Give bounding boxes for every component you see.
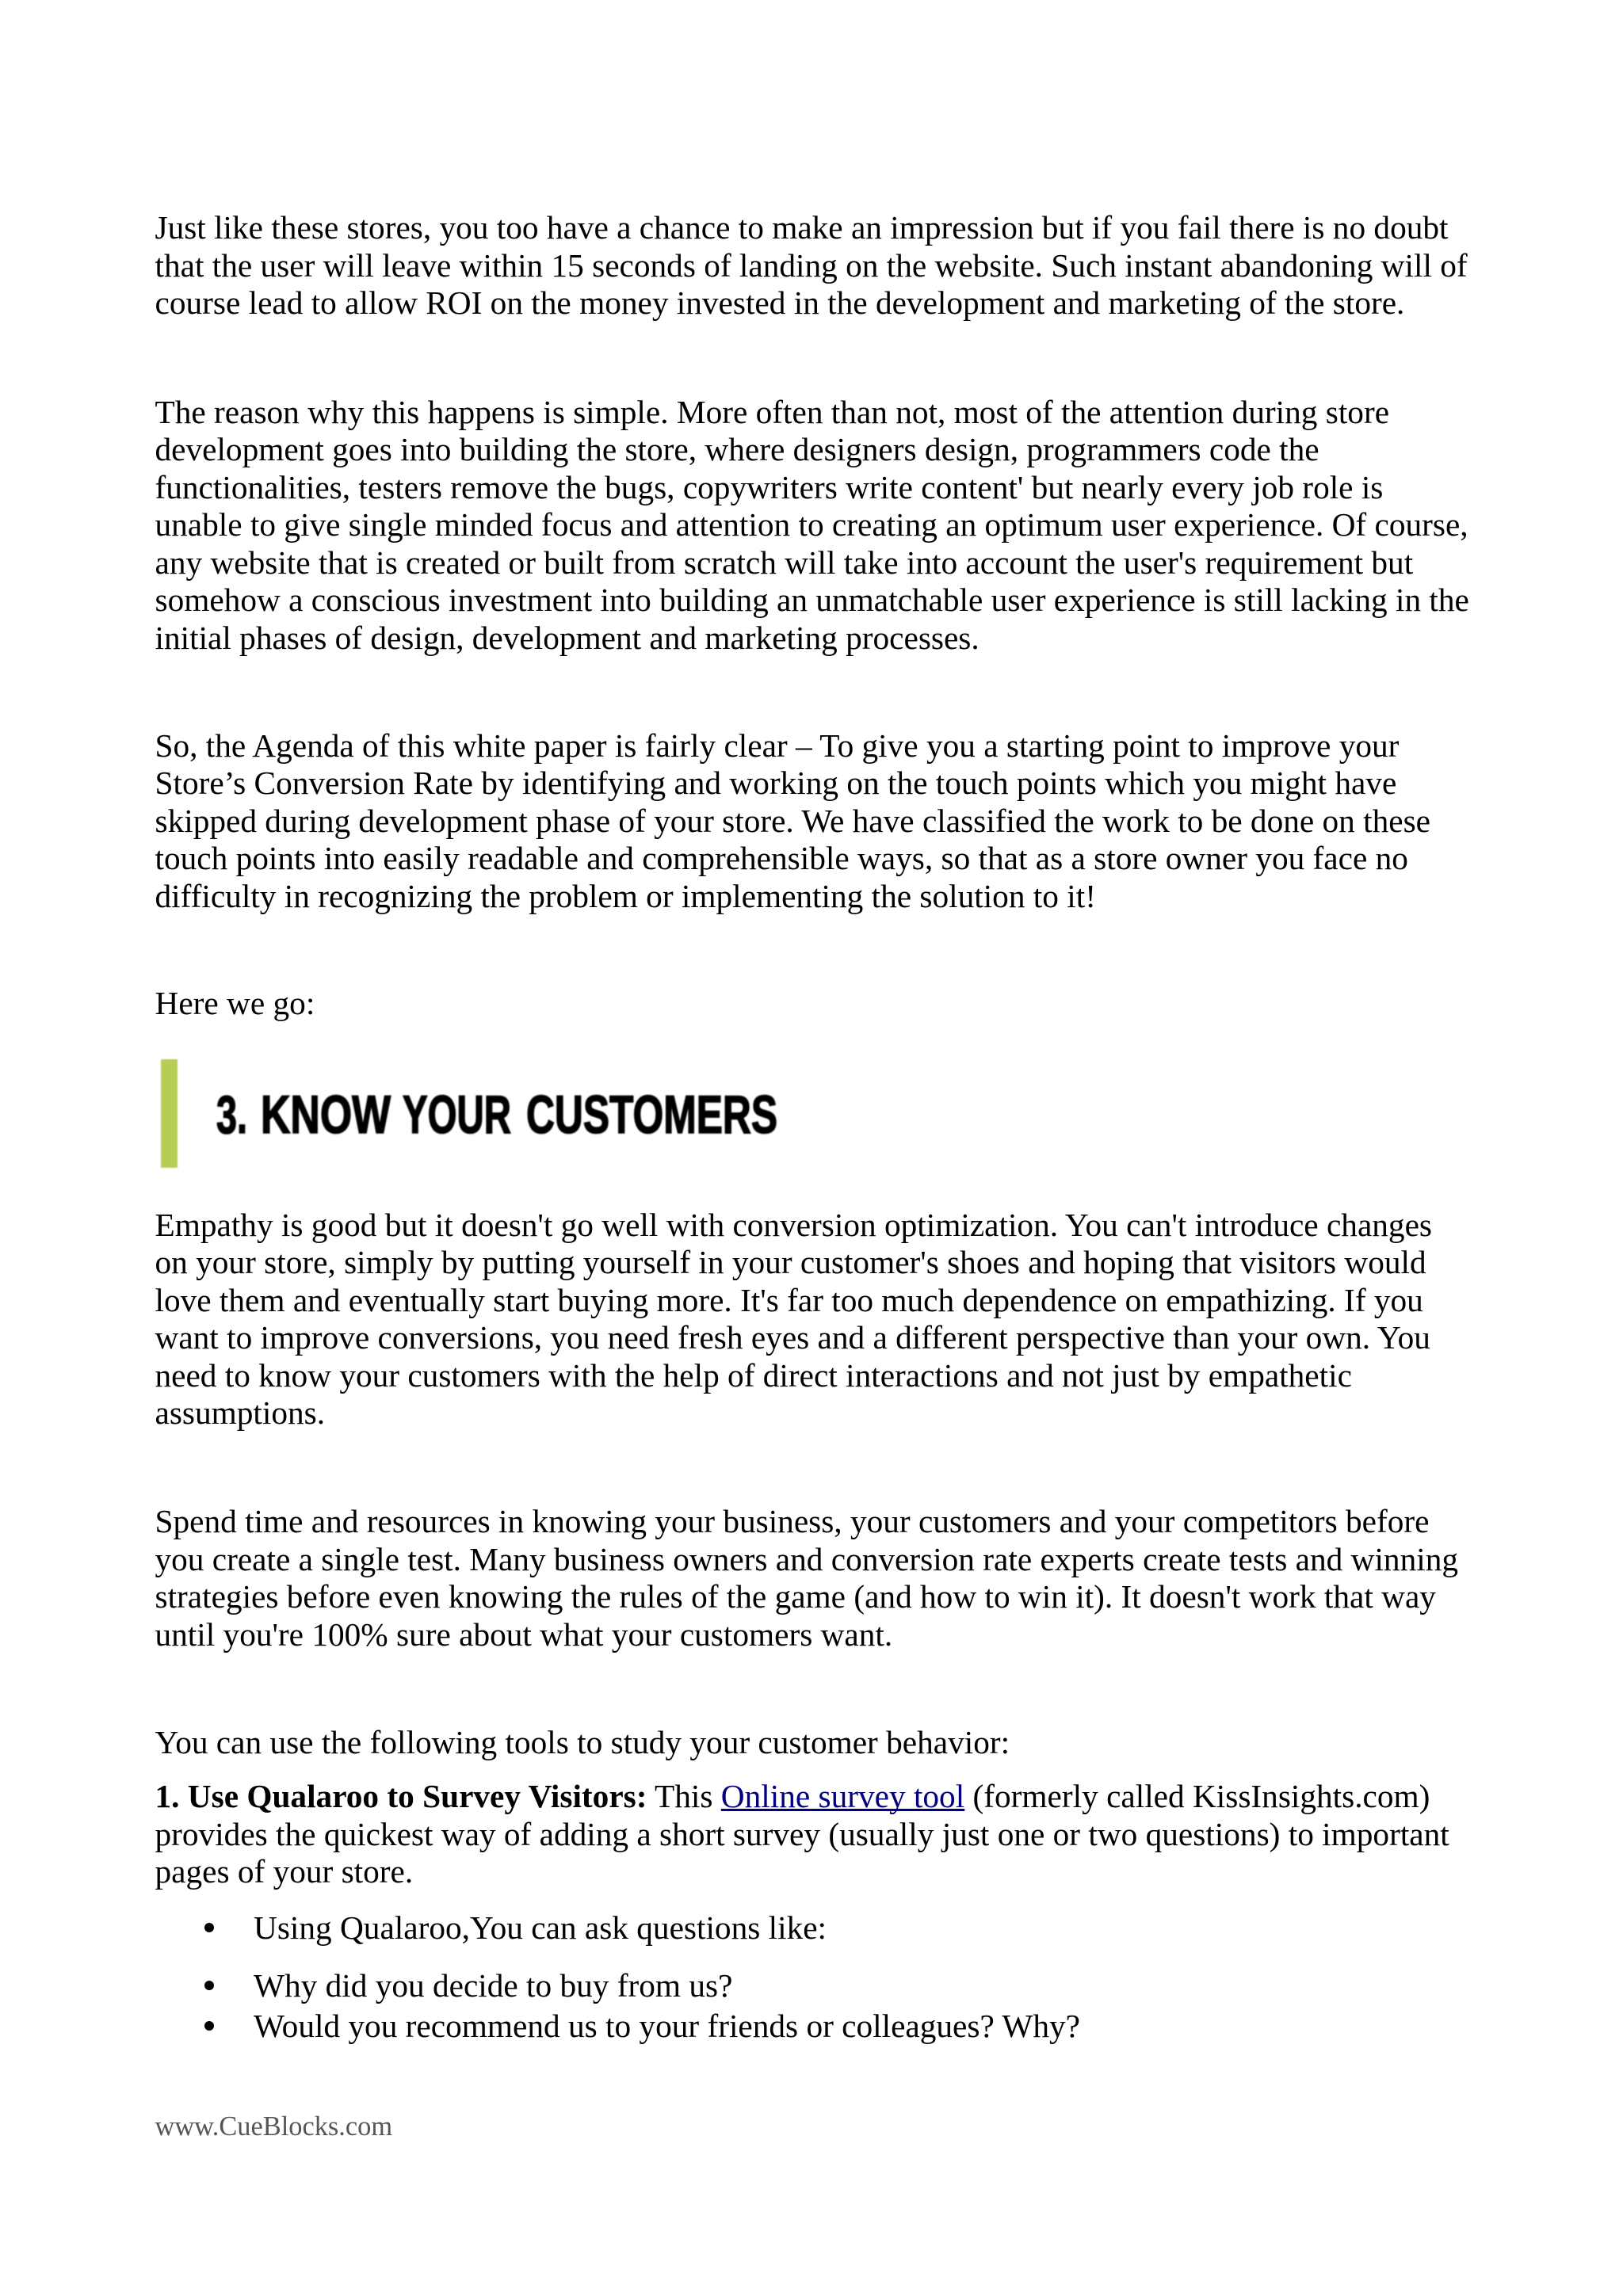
paragraph: empathy: need to know your customers with the help of direct interactions and not just by empathetic	[155, 1356, 1352, 1393]
paragraph: spend time: strategies before even knowing the rules of the game (and how to win it). It doesn't work that way	[155, 1578, 1436, 1615]
paragraph: intro: that the user will leave within 15 seconds of landing on the website. Such instant abandoning will of	[155, 247, 1468, 284]
paragraph: qualaroo: 1. Use Qualaroo to Survey Visitors: This Online survey tool (formerly called KissInsights.com)	[155, 1778, 1430, 1814]
section heading: know your customers: 3.	[216, 1085, 247, 1145]
paragraph: reason: initial phases of design, development and marketing processes.	[155, 620, 980, 656]
paragraph: agenda: touch points into easily readable and comprehensible ways, so that as a store owner you face no	[155, 840, 1408, 876]
paragraph: empathy: want to improve conversions, you need fresh eyes and a different perspective than your own. You	[155, 1319, 1430, 1356]
paragraph: reason: development goes into building the store, where designers design, programmers code the	[155, 431, 1319, 467]
bullet: recommend: Would you recommend us to your friends or colleagues? Why?	[254, 2008, 1080, 2044]
paragraph: reason: functionalities, testers remove the bugs, copywriters write content' but nearly every job role is	[155, 469, 1383, 505]
paragraph: agenda: skipped during development phase of your store. We have classified the work to be done on these	[155, 802, 1430, 838]
paragraph: qualaroo	[155, 1778, 1449, 1890]
paragraph: spend time	[155, 1503, 1458, 1653]
paragraph: empathy: on your store, simply by putting yourself in your customer's shoes and hoping that visitors would	[155, 1244, 1426, 1280]
paragraph: empathy: love them and eventually start buying more. It's far too much dependence on empathizing. If you	[155, 1282, 1423, 1318]
paragraph: spend time: until you're 100% sure about what your customers want.	[155, 1616, 892, 1653]
paragraph: agenda	[155, 727, 1430, 914]
paragraph: reason	[155, 393, 1469, 656]
section heading: know your customers: KNOW	[261, 1085, 391, 1145]
bullet: using qualaroo: Using Qualaroo,You can ask questions like:	[254, 1909, 827, 1946]
paragraph: reason: The reason why this happens is simple. More often than not, most of the attention during store	[155, 393, 1389, 429]
paragraph: empathy	[155, 1206, 1432, 1431]
paragraph: reason: unable to give single minded focus and attention to creating an optimum user experience. Of course,	[155, 506, 1468, 543]
paragraph: qualaroo: provides the quickest way of adding a short survey (usually just one or two questions) to important	[155, 1816, 1449, 1852]
paragraph: spend time: you create a single test. Many business owners and conversion rate experts create tests and winning	[155, 1540, 1458, 1577]
paragraph: agenda: difficulty in recognizing the problem or implementing the solution to it!	[155, 878, 1096, 914]
paragraph: intro	[155, 209, 1468, 321]
paragraph: agenda: Store’s Conversion Rate by identifying and working on the touch points which you might have	[155, 765, 1396, 801]
paragraph: reason: somehow a conscious investment into building an unmatchable user experience is still lacking in the	[155, 582, 1469, 618]
paragraph: empathy: Empathy is good but it doesn't go well with conversion optimization. You can't introduce changes	[155, 1206, 1432, 1242]
bullet: why buy: Why did you decide to buy from us?	[254, 1967, 732, 2004]
paragraph: intro: course lead to allow ROI on the money invested in the development and marketing of the store.	[155, 284, 1404, 321]
section heading: know your customers	[160, 1058, 777, 1169]
section heading: know your customers: YOUR	[403, 1085, 511, 1145]
paragraph: qualaroo: pages of your store.	[155, 1853, 413, 1890]
paragraph: empathy: assumptions.	[155, 1394, 325, 1431]
text: here we go: Here we go:	[155, 985, 315, 1021]
text: tools intro: You can use the following tools to study your customer behavior:	[155, 1724, 1010, 1760]
paragraph: reason: any website that is created or built from scratch will take into account the user's requirement but	[155, 543, 1413, 580]
footer: website: www.CueBlocks.com	[155, 2111, 392, 2142]
paragraph: spend time: Spend time and resources in knowing your business, your customers and your competitors before	[155, 1503, 1429, 1539]
paragraph: agenda: So, the Agenda of this white paper is fairly clear – To give you a starting point to improve your	[155, 727, 1399, 764]
paragraph: intro: Just like these stores, you too have a chance to make an impression but if you fail there is no doubt	[155, 209, 1449, 246]
